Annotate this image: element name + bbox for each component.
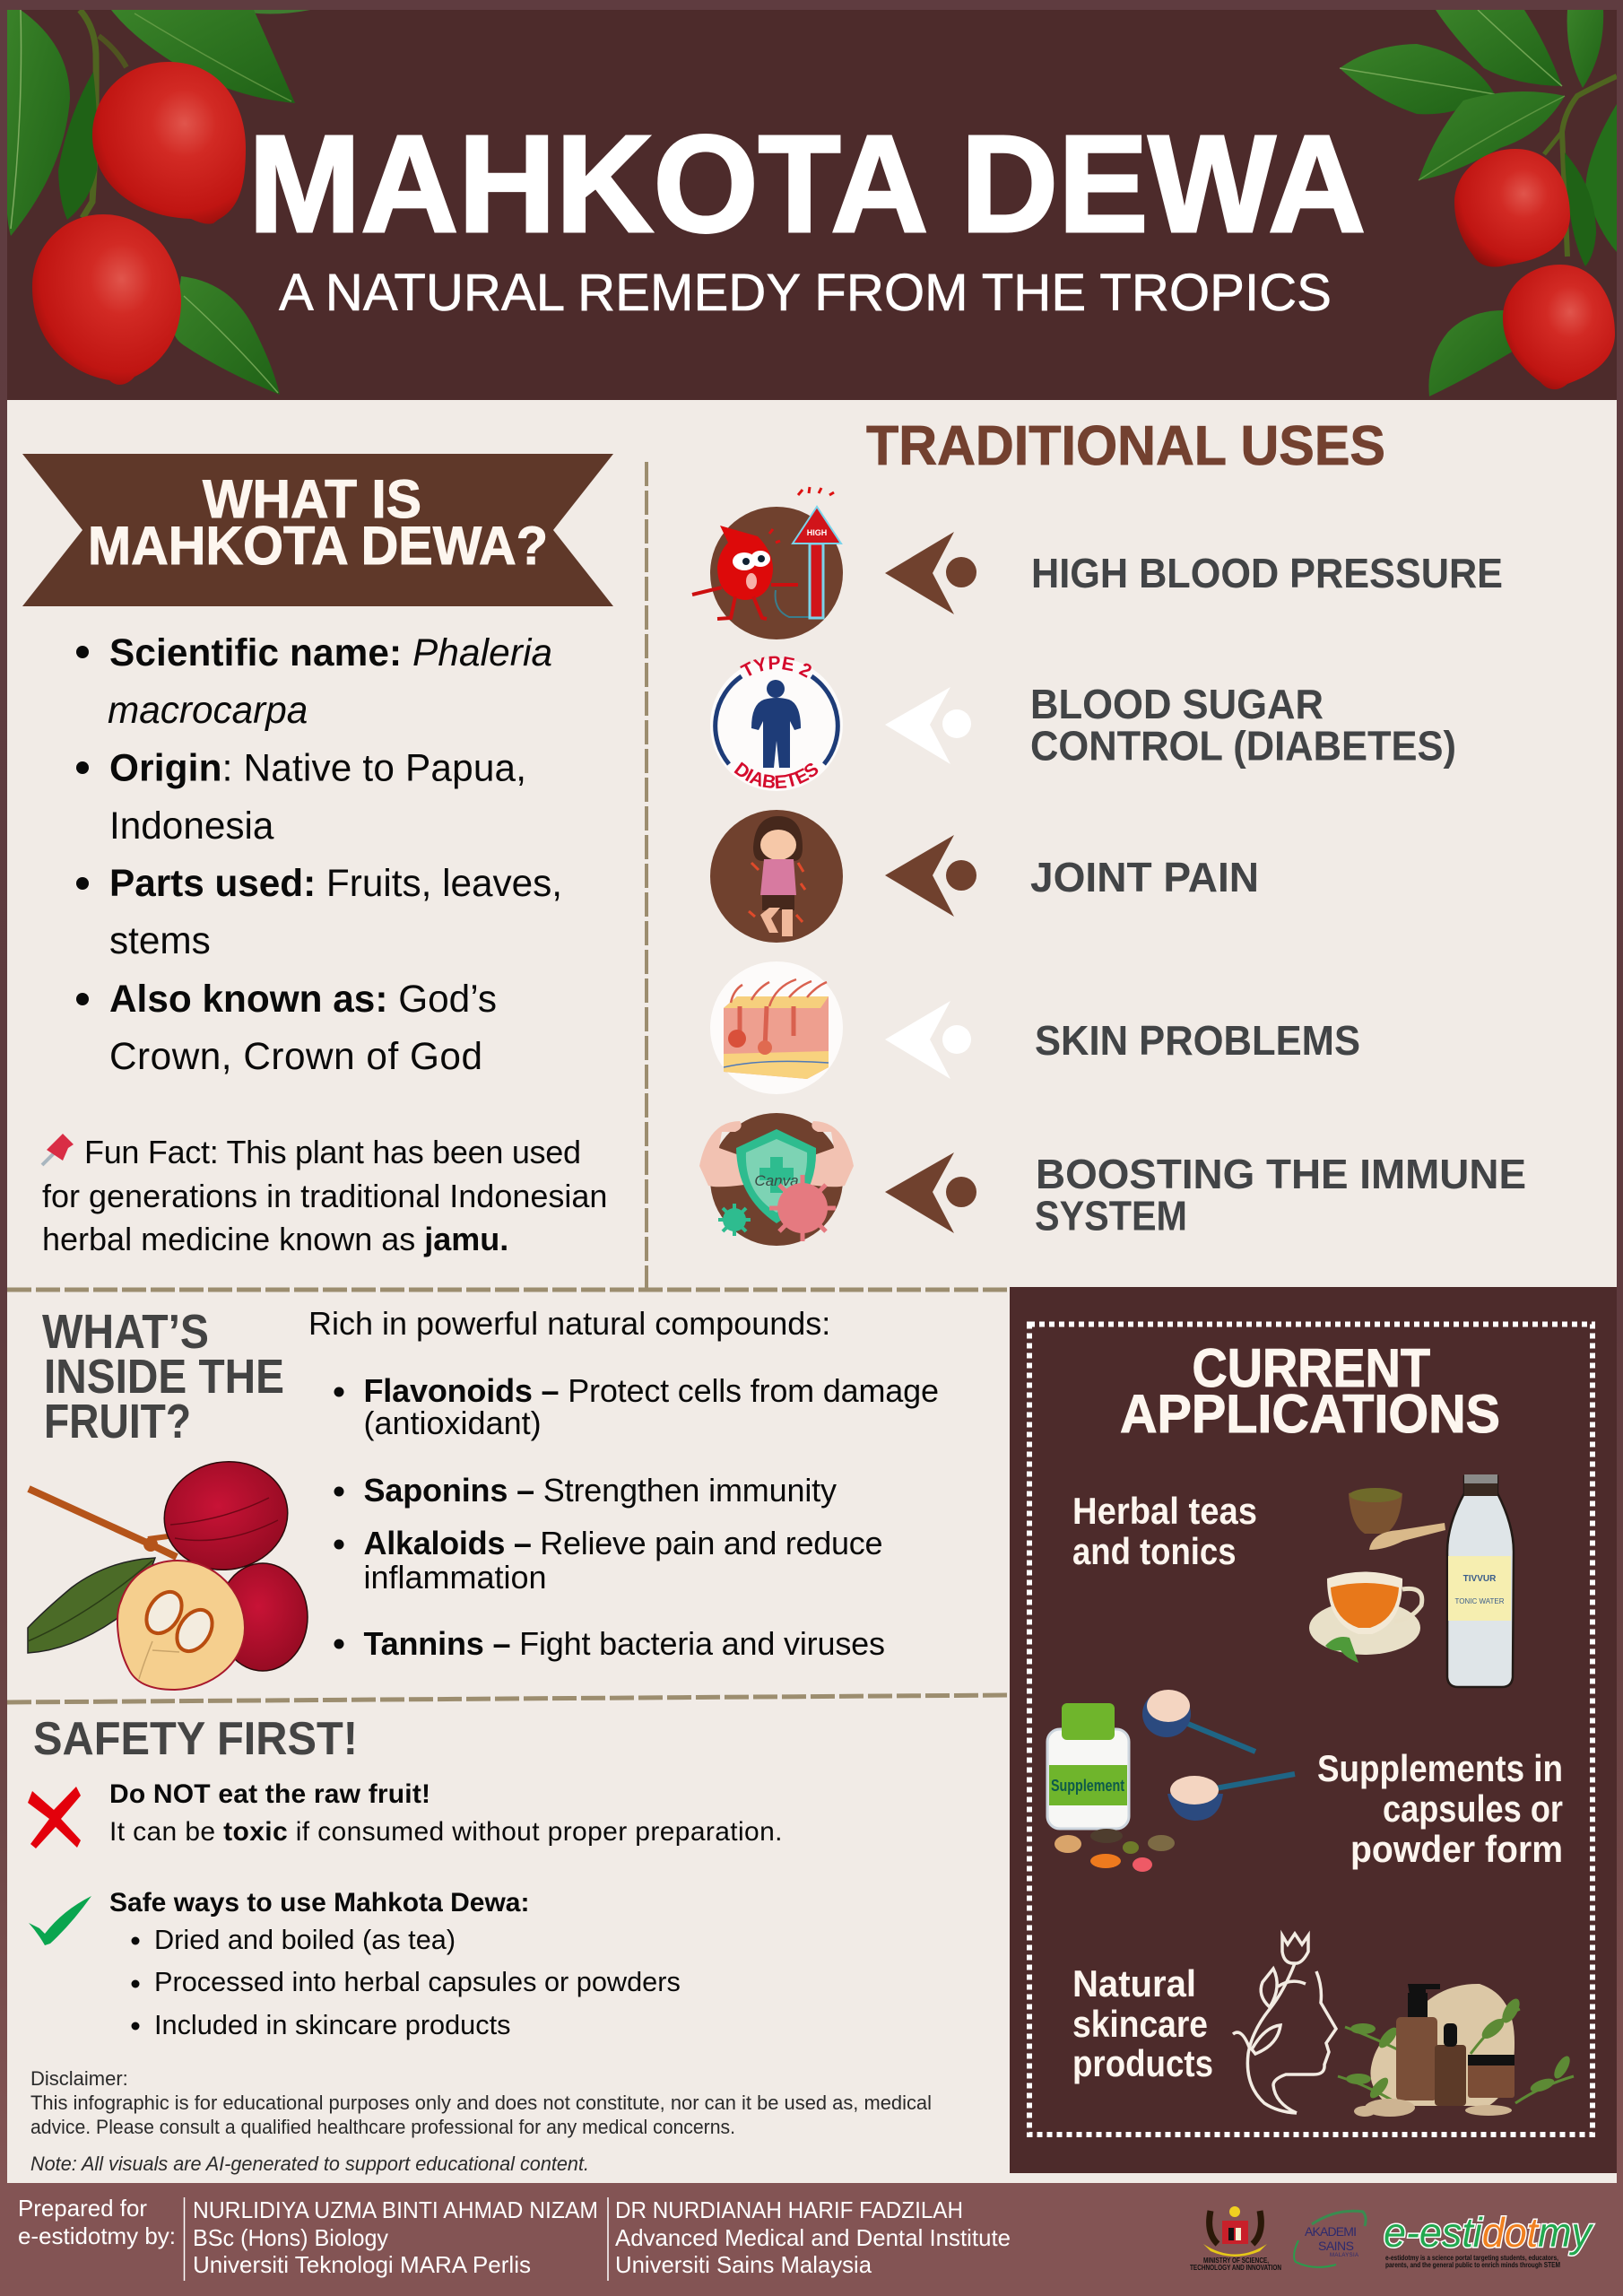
use: joint pain (710, 810, 1259, 943)
heading: traditional uses: TRADITIONAL USES (866, 415, 1385, 477)
bullet list: facts: Indonesia (109, 804, 274, 847)
use: blood sugar control (710, 657, 1456, 791)
compounds list: Saponins – Strengthen immunity (364, 1472, 837, 1509)
logo: akademi sains: SAINS (1318, 2239, 1354, 2253)
icon: pushpin (42, 1134, 74, 1165)
label: herbal teas: and tonics (1072, 1530, 1236, 1572)
warning text: It can be toxic if consumed without proper preparation. (109, 1817, 782, 1847)
bullet list: facts: Origin: Native to Papua, (109, 746, 526, 789)
icon: girl in pain (710, 810, 843, 943)
title: MAHKOTA DEWA (248, 107, 1366, 261)
disclaimer: Disclaimer: (30, 2067, 128, 2090)
author credit (193, 2196, 598, 2278)
disclaimer: This infographic is for educational purposes only and does not constitute, nor can it be used as, medical (30, 2092, 932, 2114)
fun fact text: herbal medicine known as jamu. (42, 1221, 508, 1257)
compounds list: inflammation (364, 1559, 547, 1596)
icon: blood drop with gauge: HIGH (807, 528, 827, 537)
bullet list: facts: Scientific name: Phaleria (109, 631, 552, 674)
bullet list: facts: Also known as: God’s (109, 978, 497, 1020)
logo: e-estidotmy: parents, and the general public to enrich minds through STEM (1385, 2261, 1560, 2269)
illustration: cut fruit (28, 1452, 308, 1690)
illustration: supplements: Supplement (1051, 1777, 1124, 1795)
logo: e-estidotmy: e-estidotmy is a science portal targeting students, educators, (1385, 2254, 1558, 2262)
disclaimer (30, 2067, 932, 2175)
icon: blood drop with gauge (692, 487, 843, 639)
label: JOINT PAIN (1030, 854, 1259, 900)
safe ways list (109, 1888, 681, 2040)
panel: traditional uses (692, 415, 1526, 1246)
label: skincare: products (1072, 2042, 1213, 2084)
heading (1120, 1338, 1500, 1444)
footer background (0, 2183, 1623, 2296)
arrow marker (885, 687, 971, 764)
illustration: tea and tonic: TONIC WATER (1455, 1597, 1505, 1605)
icon: skin cross-section (710, 961, 843, 1094)
author credit: Universiti Teknologi MARA Perlis (193, 2251, 531, 2278)
author credit: BSc (Hons) Biology (193, 2224, 388, 2251)
icon: type 2 diabetes: TYPE 2 (740, 657, 812, 678)
panel: what is mahkota dewa (22, 454, 613, 1257)
panel: safety first (28, 1713, 932, 2175)
compounds list: Rich in powerful natural compounds: (308, 1305, 830, 1342)
red fruit right upper (1454, 149, 1570, 267)
arrow marker (885, 1152, 976, 1233)
ribbon banner heading (22, 454, 613, 606)
label: SYSTEM (1035, 1193, 1187, 1239)
divider horizontal upper (7, 1288, 1010, 1292)
compounds list: Flavonoids – Protect cells from damage (364, 1372, 939, 1409)
icon: shield and virus: Canva (754, 1172, 799, 1189)
fun fact text: Fun Fact: This plant has been used (84, 1134, 581, 1170)
illustration: face and flower outline (1233, 1934, 1336, 2113)
logo: ministry crest: TECHNOLOGY AND INNOVATION (1190, 2264, 1281, 2272)
compounds list: Tannins – Fight bacteria and viruses (364, 1625, 885, 1662)
disclaimer: Note: All visuals are AI-generated to support educational content. (30, 2152, 589, 2175)
warning text (109, 1779, 782, 1847)
header band (6, 9, 1617, 400)
supervisor credit (615, 2196, 1011, 2278)
red fruit right lower (1503, 265, 1615, 389)
label: supplements (1317, 1747, 1563, 1870)
label: skincare (1072, 1962, 1213, 2084)
label: HIGH BLOOD PRESSURE (1031, 550, 1503, 596)
label: herbal teas (1072, 1490, 1257, 1572)
supervisor credit: DR NURDIANAH HARIF FADZILAH (615, 2196, 963, 2223)
heading: SAFETY FIRST! (33, 1713, 358, 1765)
safe ways list: Included in skincare products (154, 2009, 510, 2040)
use: high blood pressure (692, 487, 1503, 639)
label: herbal teas: Herbal teas (1072, 1490, 1257, 1532)
label (1030, 681, 1456, 770)
heading: CURRENT (1193, 1338, 1430, 1398)
logo: ministry crest: MINISTRY OF SCIENCE, (1203, 2257, 1269, 2265)
safe ways list: Processed into herbal capsules or powders (154, 1966, 681, 1997)
heading: APPLICATIONS (1120, 1384, 1500, 1444)
fun fact text (42, 1134, 607, 1257)
prepared for: e-estidotmy by: (18, 2222, 176, 2249)
author credit: NURLIDIYA UZMA BINTI AHMAD NIZAM (193, 2196, 598, 2223)
supervisor credit: Universiti Sains Malaysia (615, 2251, 872, 2278)
header botanical left (6, 9, 310, 395)
prepared for (18, 2195, 176, 2249)
illustration: tea and tonic (1309, 1474, 1514, 1687)
bullet list: facts: macrocarpa (108, 689, 308, 731)
illustration: supplements (1047, 1690, 1295, 1872)
warning text: Do NOT eat the raw fruit! (109, 1779, 430, 1809)
label: supplements: Supplements in (1317, 1747, 1563, 1789)
bullet list: facts: Crown, Crown of God (109, 1035, 482, 1077)
footer (18, 2195, 1594, 2281)
compounds list (308, 1305, 939, 1662)
icon: red cross (28, 1787, 81, 1848)
compounds list: (antioxidant) (364, 1405, 542, 1441)
bullet list: facts: stems (109, 919, 211, 961)
logo: akademi sains (1294, 2211, 1366, 2267)
logo: ministry crest (1190, 2206, 1281, 2272)
compounds list: Alkaloids – Relieve pain and reduce (364, 1525, 882, 1561)
label: BLOOD SUGAR (1030, 681, 1324, 727)
heading: FRUIT? (44, 1395, 191, 1448)
label: skincare: Natural (1072, 1962, 1196, 2005)
heading (42, 1305, 284, 1448)
subtitle: A NATURAL REMEDY FROM THE TROPICS (279, 264, 1332, 322)
heading: WHAT’S (42, 1305, 209, 1359)
label: CONTROL (DIABETES) (1030, 723, 1456, 770)
disclaimer: advice. Please consult a qualified healthcare professional for any medical concerns. (30, 2116, 735, 2138)
heading: INSIDE THE (44, 1350, 284, 1404)
panel: current applications (1010, 1287, 1617, 2173)
ribbon banner heading: WHAT IS (203, 469, 421, 529)
divider horizontal lower (7, 1695, 1010, 1702)
ribbon banner heading: MAHKOTA DEWA? (88, 516, 548, 576)
bullet list: facts: Parts used: Fruits, leaves, (109, 862, 562, 904)
safe ways list: Safe ways to use Mahkota Dewa: (109, 1888, 529, 1918)
icon: type 2 diabetes (710, 657, 843, 791)
use: skin problems (710, 961, 1360, 1094)
fun fact text: for generations in traditional Indonesian (42, 1178, 607, 1214)
panel: what's inside the fruit (28, 1305, 939, 1690)
prepared for: Prepared for (18, 2195, 147, 2222)
red fruit lower (32, 214, 181, 385)
icon: green check (29, 1896, 91, 1945)
supervisor credit: Advanced Medical and Dental Institute (615, 2224, 1011, 2251)
header botanical right (1340, 10, 1617, 396)
use: boosting immune system (699, 1113, 1526, 1246)
illustration: tea and tonic: TIVVUR (1463, 1574, 1497, 1584)
label: supplements: powder form (1350, 1828, 1563, 1870)
divider vertical (645, 462, 648, 1288)
icon: shield and virus (699, 1113, 854, 1246)
bullet list: facts (76, 631, 562, 1077)
logo: e-estidotmy: e-estidotmy (1384, 2209, 1594, 2256)
label: SKIN PROBLEMS (1035, 1017, 1360, 1064)
illustration: skincare products (1338, 1984, 1574, 2117)
label (1035, 1151, 1526, 1239)
red fruit (92, 62, 246, 224)
arrow marker (885, 1001, 971, 1079)
arrow marker (885, 532, 976, 614)
arrow marker (885, 835, 976, 917)
content paper panel (7, 400, 1617, 2183)
logo: akademi sains: AKADEMI (1305, 2224, 1357, 2239)
label: BOOSTING THE IMMUNE (1036, 1151, 1526, 1197)
icon: type 2 diabetes: DIABETES (733, 762, 818, 789)
label: supplements: capsules or (1383, 1787, 1563, 1830)
safe ways list: Dried and boiled (as tea) (154, 1924, 456, 1955)
label: skincare: skincare (1072, 2003, 1208, 2045)
logo: akademi sains: MALAYSIA (1330, 2253, 1358, 2258)
